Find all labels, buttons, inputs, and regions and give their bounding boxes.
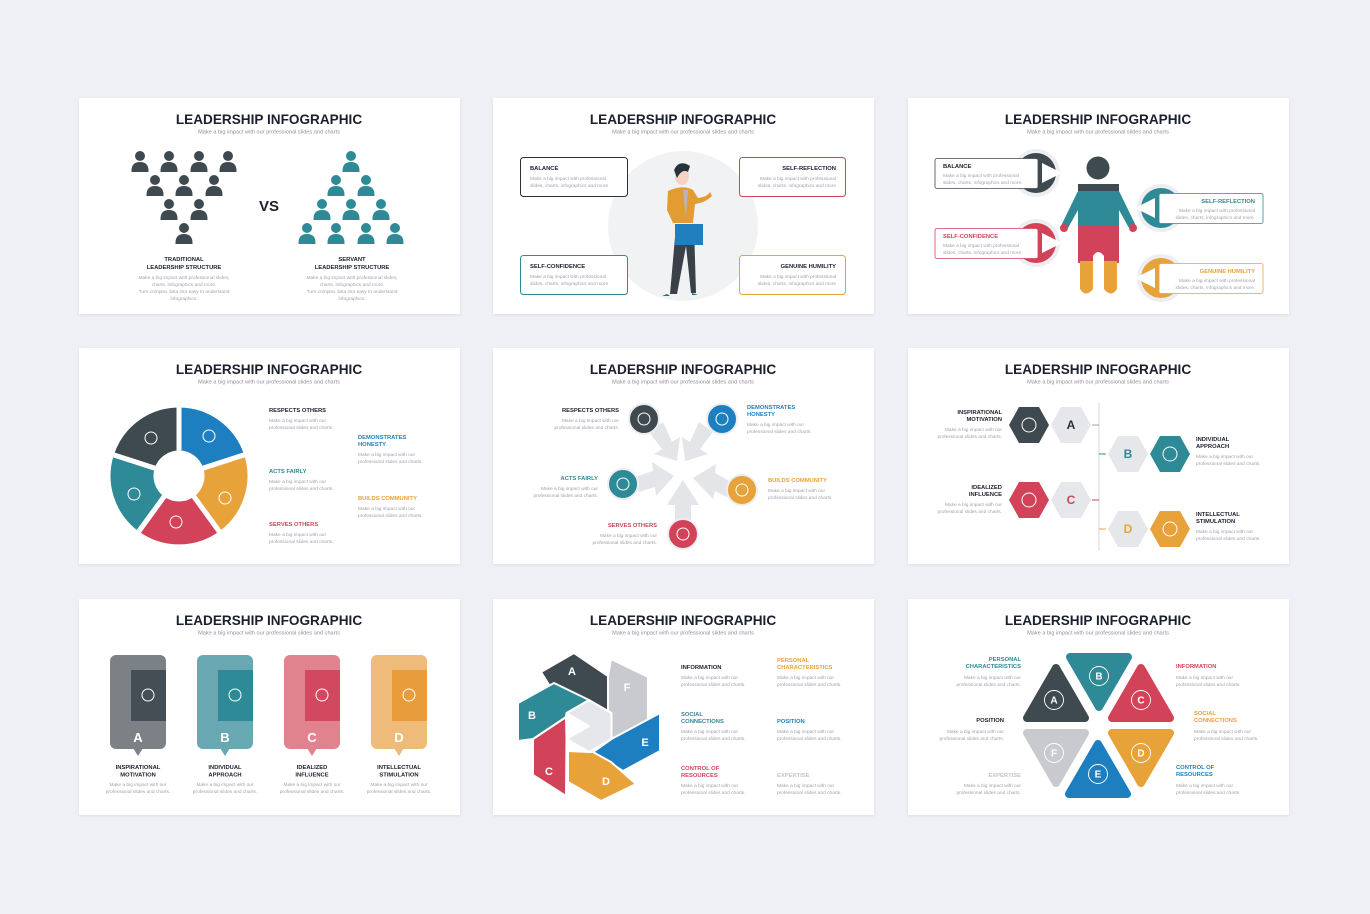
labels: professional slides and charts.: [269, 486, 334, 492]
box: self-confidence: SELF-CONFIDENCE: [530, 264, 585, 270]
timeline: [1092, 403, 1106, 551]
callout: genuine humility: Make a big impact with professional: [1179, 278, 1255, 284]
labels: CONNECTIONS: [1194, 718, 1237, 724]
labels: professional slides and charts.: [956, 682, 1021, 688]
text: traditional: infographics.: [170, 296, 198, 302]
labels: Make a big impact with our: [269, 479, 326, 485]
title: LEADERSHIP INFOGRAPHIC: [590, 613, 776, 628]
title: Make a big impact with our professional slides and charts: [1027, 630, 1169, 636]
labels: HONESTY: [747, 412, 775, 418]
callout: self-confidence: slides, charts, infographics and more.: [943, 250, 1022, 256]
box: genuine humility: GENUINE HUMILITY: [781, 264, 836, 270]
slide 9: triangle hexagon: C: [1137, 696, 1145, 706]
labels: [269, 408, 423, 545]
box: self-reflection: SELF-REFLECTION: [782, 166, 836, 172]
slide 9: triangle hexagon: [908, 599, 1289, 815]
labels: Make a big impact with our: [358, 506, 415, 512]
box: self-reflection: slides, charts, infographics and more: [758, 183, 836, 189]
card C: INFLUENCE: [295, 772, 329, 778]
labels: CHARACTERISTICS: [966, 664, 1021, 670]
text: servant: charts, infographics and more.: [320, 282, 384, 288]
labels: professional slides and charts.: [554, 425, 619, 431]
title: LEADERSHIP INFOGRAPHIC: [176, 112, 362, 127]
labels: INDIVIDUAL: [1196, 437, 1230, 443]
labels: professional slides and charts.: [1196, 461, 1261, 467]
title: LEADERSHIP INFOGRAPHIC: [176, 362, 362, 377]
title: LEADERSHIP INFOGRAPHIC: [590, 112, 776, 127]
labels: professional slides and charts.: [937, 509, 1002, 515]
slide 1: traditional vs servant: [79, 98, 460, 314]
text: servant: [307, 257, 398, 302]
labels: professional slides and charts.: [1176, 790, 1241, 796]
hexagons: B: [1124, 447, 1133, 461]
card D: D: [394, 730, 404, 745]
callout: self-confidence: SELF-CONFIDENCE: [943, 234, 998, 240]
slide 5: converging arrows: [493, 348, 874, 564]
labels: RESPECTS OTHERS: [562, 408, 619, 414]
labels: Make a big impact with our: [269, 418, 326, 424]
slide 4: pentagon segments: [79, 348, 460, 564]
slide 8: hexagon pinwheel: A: [568, 666, 576, 678]
labels: Make a big impact with our: [1176, 783, 1233, 789]
labels: professional slides and charts.: [592, 540, 657, 546]
labels: professional slides and charts.: [1194, 736, 1259, 742]
box: self-reflection: [740, 158, 846, 196]
hexagons: D: [1124, 522, 1133, 536]
callout: self-reflection: slides, charts, infographics and more.: [1176, 215, 1255, 221]
card C: C: [307, 730, 317, 745]
card A: MOTIVATION: [120, 772, 156, 778]
callout: balance: Make a big impact with professional: [943, 173, 1019, 179]
card A: Make a big impact with our: [109, 782, 167, 788]
labels: professional slides and charts.: [681, 736, 746, 742]
labels: Make a big impact with our: [681, 729, 738, 735]
hexagons: C: [1067, 493, 1076, 507]
callout: self-reflection: Make a big impact with professional: [1179, 208, 1255, 214]
box: genuine humility: Make a big impact with professional: [760, 274, 836, 280]
callout: balance: BALANCE: [943, 164, 971, 170]
labels: Make a big impact with our: [945, 427, 1002, 433]
box: self-reflection: Make a big impact with professional: [760, 176, 836, 182]
labels: Make a big impact with our: [777, 675, 834, 681]
slide 9: triangle hexagon: E: [1095, 770, 1102, 780]
slide 8: hexagon pinwheel: D: [602, 776, 610, 788]
slide 3: body figure with callouts: [908, 98, 1289, 314]
labels: professional slides and charts.: [777, 736, 842, 742]
background circle: [608, 151, 758, 301]
illustration: man on phone: [662, 163, 712, 296]
labels: POSITION: [976, 718, 1004, 724]
labels: EXPERTISE: [988, 773, 1021, 779]
labels: APPROACH: [1196, 444, 1229, 450]
card C: IDEALIZED: [297, 765, 327, 771]
card A: INSPIRATIONAL: [116, 765, 161, 771]
card A: professional slides and charts.: [106, 789, 170, 795]
labels: professional slides and charts.: [768, 495, 833, 501]
slide 9: triangle hexagon: A: [1050, 696, 1058, 706]
title: Make a big impact with our professional slides and charts: [1027, 380, 1169, 386]
title: [1005, 112, 1191, 136]
labels: Make a big impact with our: [1196, 454, 1253, 460]
labels: Make a big impact with our: [562, 418, 619, 424]
labels: POSITION: [777, 719, 805, 725]
hexagons: A: [1067, 418, 1076, 432]
callout: self-confidence: [935, 219, 1062, 267]
title: [590, 362, 776, 386]
labels: Make a big impact with our: [747, 422, 804, 428]
slide 6: hexagon timeline: [908, 348, 1289, 564]
title: [176, 613, 362, 636]
card C: Make a big impact with our: [283, 782, 341, 788]
card D: STIMULATION: [379, 772, 419, 778]
labels: professional slides and charts.: [956, 790, 1021, 796]
box: balance: BALANCE: [530, 166, 558, 172]
labels: ACTS FAIRLY: [561, 476, 598, 482]
slide 7: four cards: [79, 599, 460, 815]
labels: professional slides and charts.: [533, 493, 598, 499]
labels: professional slides and charts.: [681, 790, 746, 796]
title: LEADERSHIP INFOGRAPHIC: [1005, 112, 1191, 127]
slide 8: hexagon pinwheel: F: [624, 682, 631, 694]
labels: Make a big impact with our: [1194, 729, 1251, 735]
labels: SOCIAL: [681, 712, 703, 718]
text: servant: Make a big impact with professional slides,: [307, 275, 397, 281]
box: balance: [520, 158, 628, 196]
title: LEADERSHIP INFOGRAPHIC: [1005, 362, 1191, 377]
card A: A: [133, 730, 143, 745]
card B: [193, 655, 257, 795]
labels: INFORMATION: [1176, 664, 1216, 670]
icon group: servant structure: [298, 151, 404, 244]
labels: Make a big impact with our: [768, 488, 825, 494]
box: genuine humility: slides, charts, infographics and more: [758, 281, 836, 287]
labels: MOTIVATION: [966, 417, 1002, 423]
slide 2: businessman with four boxes: [493, 98, 874, 314]
box: self-confidence: slides, charts, infographics and more: [530, 281, 608, 287]
labels: professional slides and charts.: [681, 682, 746, 688]
text: traditional: Turn complex data into easy to understand: [139, 289, 230, 295]
card C: [280, 655, 344, 795]
card C: professional slides and charts.: [280, 789, 344, 795]
slide 8: hexagon pinwheel: B: [528, 710, 536, 722]
box: genuine humility: [740, 256, 846, 294]
labels: Make a big impact with our: [269, 532, 326, 538]
labels: professional slides and charts.: [747, 429, 812, 435]
labels: Make a big impact with our: [600, 533, 657, 539]
labels: CHARACTERISTICS: [777, 665, 833, 671]
labels: [937, 410, 1261, 542]
text: traditional: [139, 257, 230, 302]
box: balance: Make a big impact with professional: [530, 176, 606, 182]
callout: self-confidence: Make a big impact with professional: [943, 243, 1019, 249]
labels: Make a big impact with our: [681, 675, 738, 681]
icon circles: [608, 404, 757, 549]
labels: Make a big impact with our: [964, 783, 1021, 789]
slide 8: hexagon pinwheel: [493, 599, 874, 815]
labels: EXPERTISE: [777, 773, 810, 779]
arrows: [635, 422, 735, 526]
vs label: VS: [259, 198, 279, 215]
labels: INTELLECTUAL: [1196, 512, 1240, 518]
title: Make a big impact with our professional slides and charts: [198, 130, 340, 136]
title: [176, 362, 362, 386]
title: [1005, 613, 1191, 636]
labels: Make a big impact with our: [777, 729, 834, 735]
title: [590, 112, 776, 136]
callout: self-reflection: SELF-REFLECTION: [1201, 199, 1255, 205]
title: [590, 613, 776, 636]
text: servant: SERVANT: [338, 257, 366, 263]
callout: balance: [935, 149, 1062, 197]
text: traditional: LEADERSHIP STRUCTURE: [147, 265, 221, 271]
labels: STIMULATION: [1196, 519, 1235, 525]
icons: [128, 430, 231, 528]
card D: professional slides and charts.: [367, 789, 431, 795]
title: Make a big impact with our professional slides and charts: [198, 630, 340, 636]
labels: Make a big impact with our: [541, 486, 598, 492]
labels: [533, 405, 833, 546]
labels: professional slides and charts.: [1196, 536, 1261, 542]
callout: balance: slides, charts, infographics and more.: [943, 180, 1022, 186]
labels: professional slides and charts.: [1176, 682, 1241, 688]
triangles: [1027, 657, 1170, 794]
card B: B: [220, 730, 230, 745]
labels: Make a big impact with our: [945, 502, 1002, 508]
card B: INDIVIDUAL: [208, 765, 242, 771]
title: Make a big impact with our professional slides and charts: [612, 630, 754, 636]
box: self-confidence: Make a big impact with professional: [530, 274, 606, 280]
labels: professional slides and charts.: [358, 459, 423, 465]
labels: CONNECTIONS: [681, 719, 724, 725]
labels: professional slides and charts.: [937, 434, 1002, 440]
text: servant: Turn complex data into easy to understand: [307, 289, 398, 295]
labels: INFORMATION: [681, 665, 721, 671]
labels: [939, 657, 1259, 796]
title: Make a big impact with our professional slides and charts: [612, 380, 754, 386]
title: LEADERSHIP INFOGRAPHIC: [176, 613, 362, 628]
slide 9: triangle hexagon: F: [1051, 748, 1057, 760]
pinwheel chart: [518, 653, 660, 801]
slide 8: hexagon pinwheel: E: [641, 737, 649, 749]
text: traditional: charts, infographics and more.: [152, 282, 216, 288]
labels: HONESTY: [358, 442, 386, 448]
card D: INTELLECTUAL: [377, 765, 421, 771]
labels: DEMONSTRATES: [358, 435, 406, 441]
labels: DEMONSTRATES: [747, 405, 795, 411]
title: Make a big impact with our professional slides and charts: [612, 130, 754, 136]
text: traditional: TRADITIONAL: [164, 257, 204, 263]
labels: INFLUENCE: [969, 492, 1002, 498]
labels: professional slides and charts.: [358, 513, 423, 519]
labels: RESOURCES: [1176, 772, 1213, 778]
labels: professional slides and charts.: [777, 790, 842, 796]
hexagons: [1009, 407, 1190, 547]
card D: [367, 655, 431, 795]
labels: professional slides and charts.: [269, 425, 334, 431]
card D: Make a big impact with our: [370, 782, 428, 788]
text: servant: LEADERSHIP STRUCTURE: [315, 265, 389, 271]
title: LEADERSHIP INFOGRAPHIC: [590, 362, 776, 377]
labels: Make a big impact with our: [964, 675, 1021, 681]
box: self-confidence: [520, 256, 628, 294]
card A: [106, 655, 170, 795]
callout: genuine humility: GENUINE HUMILITY: [1200, 269, 1255, 275]
icon group: traditional structure: [131, 151, 237, 244]
box: balance: slides, charts, infographics and more: [530, 183, 608, 189]
labels: SOCIAL: [1194, 711, 1216, 717]
card B: professional slides and charts.: [193, 789, 257, 795]
labels: RESOURCES: [681, 773, 718, 779]
labels: INSPIRATIONAL: [957, 410, 1002, 416]
labels: Make a big impact with our: [947, 729, 1004, 735]
segmented ring chart: [108, 405, 250, 547]
labels: PERSONAL: [777, 658, 810, 664]
labels: SERVES OTHERS: [269, 522, 318, 528]
card B: APPROACH: [208, 772, 242, 778]
labels: PERSONAL: [989, 657, 1021, 663]
labels: Make a big impact with our: [358, 452, 415, 458]
slide 9: triangle hexagon: D: [1137, 748, 1145, 760]
labels: IDEALIZED: [971, 485, 1002, 491]
callout: self-reflection: [1135, 184, 1263, 232]
slide 8: hexagon pinwheel: C: [545, 766, 553, 778]
labels: SERVES OTHERS: [608, 523, 657, 529]
labels: RESPECTS OTHERS: [269, 408, 326, 414]
title: [1005, 362, 1191, 386]
labels: professional slides and charts.: [939, 736, 1004, 742]
title: Make a big impact with our professional slides and charts: [198, 380, 340, 386]
text: traditional: Make a big impact with professional slides,: [139, 275, 229, 281]
card B: Make a big impact with our: [196, 782, 254, 788]
labels: Make a big impact with our: [1196, 529, 1253, 535]
callout: genuine humility: [1135, 254, 1263, 302]
labels: ACTS FAIRLY: [269, 469, 307, 475]
labels: Make a big impact with our: [777, 783, 834, 789]
labels: [681, 658, 842, 796]
labels: CONTROL OF: [1176, 765, 1215, 771]
text: servant: infographics.: [338, 296, 366, 302]
title: Make a big impact with our professional slides and charts: [1027, 130, 1169, 136]
labels: BUILDS COMMUNITY: [358, 496, 417, 502]
slide 9: triangle hexagon: B: [1095, 672, 1103, 682]
labels: Make a big impact with our: [1176, 675, 1233, 681]
title: LEADERSHIP INFOGRAPHIC: [1005, 613, 1191, 628]
labels: professional slides and charts.: [269, 539, 334, 545]
figure: [1060, 156, 1137, 294]
labels: CONTROL OF: [681, 766, 720, 772]
labels: Make a big impact with our: [681, 783, 738, 789]
labels: professional slides and charts.: [777, 682, 842, 688]
labels: BUILDS COMMUNITY: [768, 478, 827, 484]
title: [176, 112, 362, 136]
callout: genuine humility: slides, charts, infographics and more.: [1176, 285, 1255, 291]
